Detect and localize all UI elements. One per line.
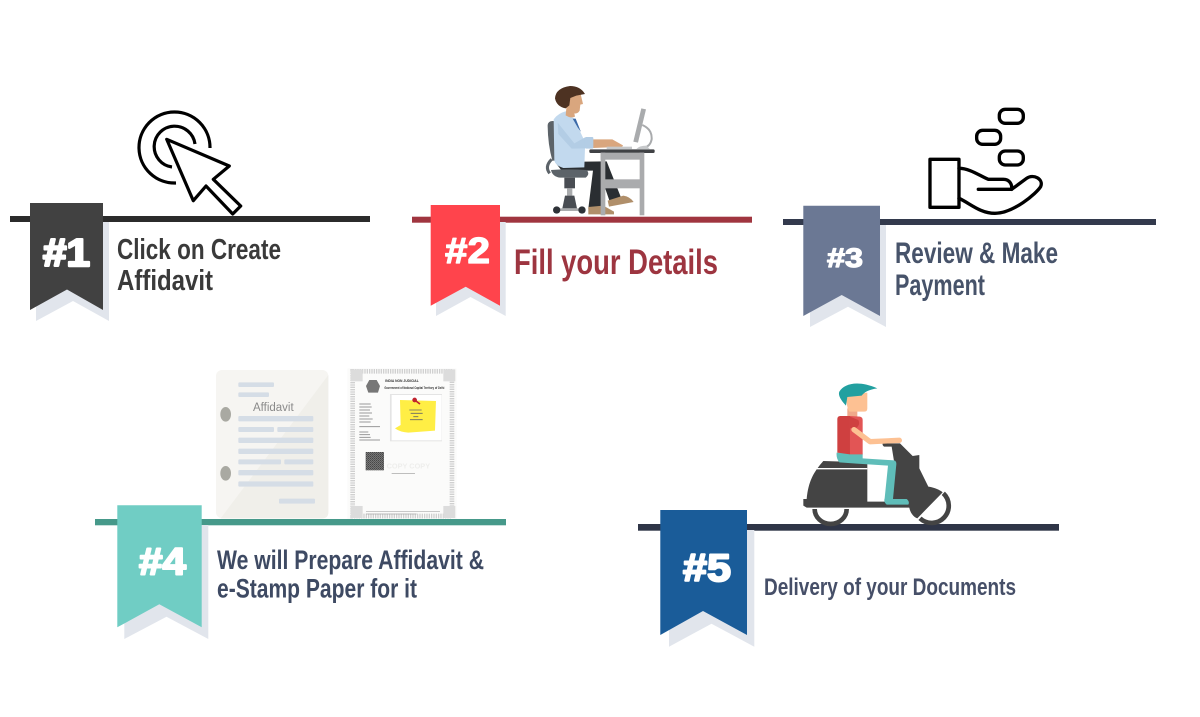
ribbon shadow 1 xyxy=(36,222,109,321)
ribbon 3 xyxy=(803,206,880,316)
shoes xyxy=(608,196,634,207)
legs xyxy=(555,161,621,209)
panel: step 1 xyxy=(10,112,370,321)
number 5: #5 xyxy=(683,547,731,590)
ribbon shadow 5 xyxy=(669,530,754,647)
scooter body xyxy=(803,461,911,508)
image: e-stamp paper: Government of National Capital Territory of Delhi xyxy=(384,386,444,390)
icon: person at desk xyxy=(547,86,655,215)
step 3 text xyxy=(895,237,1058,302)
head xyxy=(564,93,583,117)
wheels xyxy=(815,493,949,524)
torso xyxy=(837,416,850,454)
shirt xyxy=(554,111,585,168)
number 4: #4 xyxy=(139,542,186,584)
ribbon shadow 2 xyxy=(436,222,506,316)
panel: step 5 xyxy=(638,384,1059,647)
number 2: #2 xyxy=(445,230,490,271)
ribbon 4 xyxy=(117,505,202,627)
divider line 1 xyxy=(10,216,370,222)
icon: click cursor xyxy=(139,112,241,214)
divider line 4 xyxy=(95,519,506,525)
hair xyxy=(839,384,877,406)
image: e-stamp paper: INDIA NON JUDICIAL xyxy=(385,379,419,383)
step 1 text xyxy=(117,234,281,297)
number 1: #1 xyxy=(43,232,90,275)
ribbon shadow 3 xyxy=(810,225,886,327)
divider line 3 xyxy=(783,219,1156,225)
image: affidavit document xyxy=(216,370,328,518)
step 5 text: Delivery of your Documents xyxy=(764,574,1016,601)
forearm xyxy=(593,139,623,148)
number 3: #3 xyxy=(827,243,863,273)
arm xyxy=(854,430,899,442)
step 1 text: Affidavit xyxy=(117,265,213,297)
ribbon shadow 4 xyxy=(124,525,208,639)
divider line 5 xyxy=(638,524,1059,531)
step 1 text: Click on Create xyxy=(117,234,281,266)
panel: step 4 xyxy=(95,368,506,639)
step 4 text: e-Stamp Paper for it xyxy=(217,574,417,604)
ribbon 2 xyxy=(431,205,500,306)
divider line 2 xyxy=(412,217,752,223)
image: affidavit document: Affidavit xyxy=(253,400,294,414)
scooter front xyxy=(882,443,943,518)
step 4 text: We will Prepare Affidavit & xyxy=(217,545,484,575)
step 4 text xyxy=(217,545,484,604)
ribbon 1 xyxy=(30,203,103,310)
panel: step 3 xyxy=(783,109,1156,327)
chair xyxy=(547,121,588,214)
hair xyxy=(555,86,585,108)
icon: scooter rider xyxy=(803,384,949,524)
step 3 text: Review & Make xyxy=(895,237,1058,270)
face xyxy=(846,393,867,412)
desk xyxy=(589,149,655,153)
panel: step 2 xyxy=(412,86,752,316)
step 2 text: Fill your Details xyxy=(514,243,718,282)
neck xyxy=(847,408,857,420)
step 3 text: Payment xyxy=(895,269,985,302)
trousers xyxy=(837,453,909,505)
image: e-stamp paper: COPY COPY xyxy=(387,462,430,471)
computer xyxy=(633,108,646,143)
ribbon 5 xyxy=(660,510,747,635)
icon: hand with coins xyxy=(930,109,1041,213)
image: e-stamp paper xyxy=(347,368,457,519)
